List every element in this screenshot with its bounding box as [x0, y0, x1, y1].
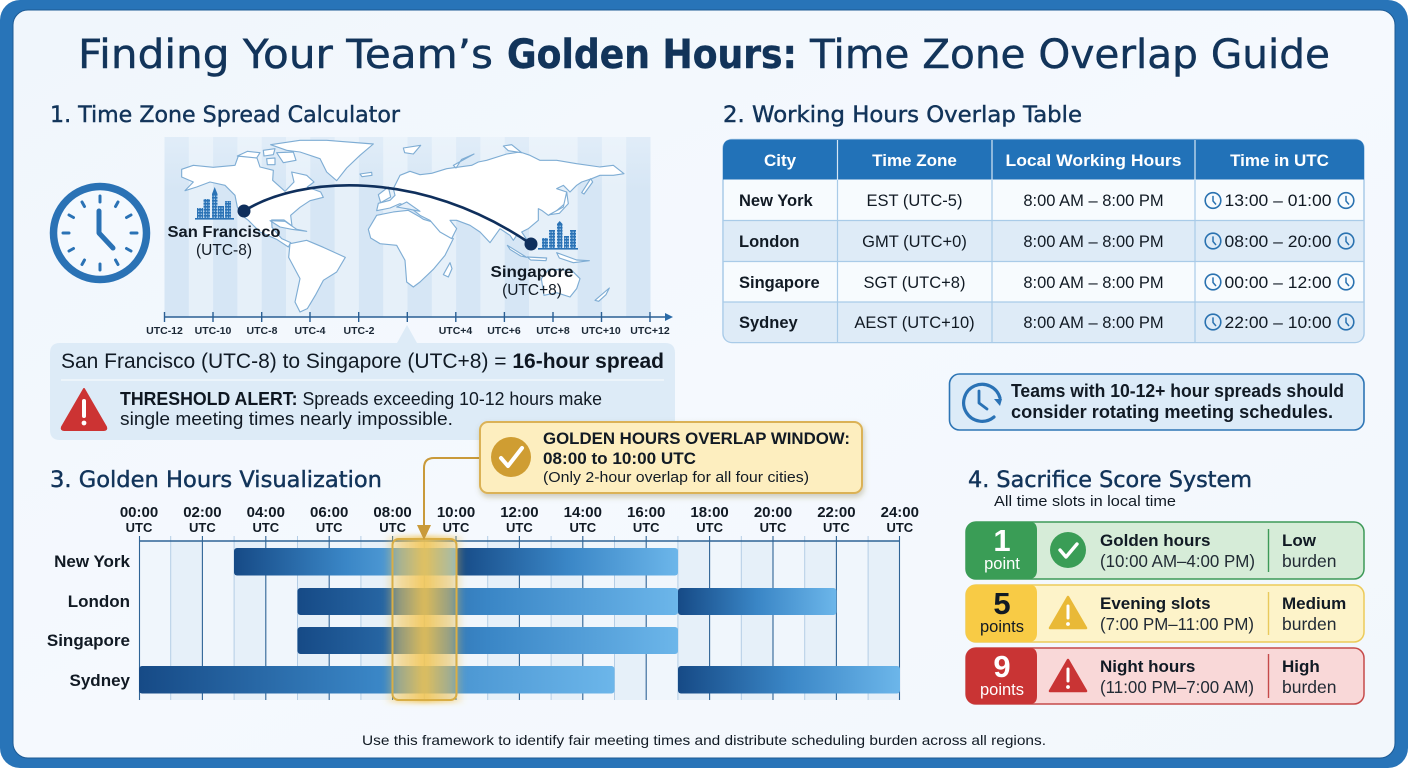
row: London: GMT (UTC+0): [862, 233, 967, 251]
bars: Sydney: [139, 666, 900, 694]
score row: 5 points: points: [980, 618, 1024, 636]
icon: red alert triangle: [62, 389, 106, 430]
bars: London: [298, 588, 836, 615]
score row: 1 point: 1: [993, 523, 1011, 558]
table header: Time in UTC: [1230, 151, 1329, 170]
icon: San Francisco skyline: [195, 187, 234, 220]
hour labels: 00:00: [120, 504, 158, 521]
row: Sydney: 22:00 – 10:00: [1224, 314, 1332, 332]
icon: Singapore skyline: [538, 221, 578, 250]
subheading: local time note: All time slots in local time: [994, 494, 1176, 510]
score row: 1 point: point: [984, 555, 1020, 573]
score row: 9 points: burden: [1282, 677, 1336, 697]
UTC axis: UTC-8: [247, 325, 278, 337]
icon: rotating clock: [964, 384, 1002, 421]
chart grid: [139, 536, 900, 700]
label: Singapore: Singapore: [490, 264, 574, 281]
hour labels: UTC: [379, 520, 407, 535]
callout text: 08:00 to 10:00 UTC: [543, 450, 696, 468]
hour labels: UTC: [252, 520, 280, 535]
table: working hours overlap: [723, 140, 1364, 342]
threshold alert text: [120, 389, 602, 429]
label: Singapore: [490, 264, 574, 299]
table header: Local Working Hours: [1006, 151, 1182, 170]
label: Singapore: (UTC+8): [502, 282, 562, 299]
table header: [764, 151, 1329, 170]
arc between San Francisco and Singapore: [244, 185, 531, 244]
row: London: [739, 233, 1354, 251]
icon: wall clock: [54, 186, 146, 280]
score row: 9 points: points: [980, 681, 1024, 699]
hour labels: UTC: [886, 520, 914, 535]
icon: gold check: [491, 437, 531, 477]
heading: section 4: 4. Sacrifice Score System: [968, 467, 1252, 493]
hour labels: 10:00: [437, 504, 475, 521]
row: Sydney: [739, 314, 1354, 332]
hour labels: UTC: [633, 520, 660, 535]
golden overlap band: [384, 536, 465, 703]
score row: 9 points: High: [1282, 657, 1320, 676]
hour labels: 06:00: [310, 504, 348, 521]
marker: San Francisco: [238, 204, 250, 218]
row: Singapore: SGT (UTC+8): [864, 274, 965, 292]
UTC axis: UTC-10: [195, 325, 232, 337]
row: Sydney: Sydney: [739, 314, 799, 332]
threshold alert text: single meeting times nearly impossible.: [120, 409, 453, 429]
bars: New York: [234, 548, 678, 576]
UTC axis: UTC+8: [536, 325, 570, 337]
score row: 5 points: burden: [1282, 614, 1336, 634]
callout text: [543, 430, 850, 486]
UTC axis: UTC+12: [630, 325, 670, 337]
hour labels: 14:00: [564, 504, 602, 521]
row: London: 8:00 AM – 8:00 PM: [1023, 233, 1164, 251]
hour labels: 18:00: [690, 504, 729, 521]
hour labels: 22:00: [817, 504, 856, 521]
row: Singapore: Singapore: [739, 274, 820, 292]
UTC axis: [146, 312, 673, 337]
row labels: Singapore: [47, 631, 130, 650]
world map with time zone stripes: [164, 137, 650, 317]
row: London: London: [739, 233, 799, 251]
callout text: GOLDEN HOURS OVERLAP WINDOW:: [543, 430, 850, 448]
hour labels: UTC: [126, 520, 153, 535]
row: Singapore: [739, 274, 1354, 292]
row labels: Sydney: [70, 671, 131, 690]
hour labels: UTC: [506, 520, 533, 535]
hour labels: UTC: [316, 520, 343, 535]
row: Sydney: 8:00 AM – 8:00 PM: [1023, 314, 1164, 332]
row labels: New York: [54, 552, 131, 571]
hour labels: 16:00: [627, 504, 665, 521]
row: New York: New York: [739, 192, 813, 210]
score row: 5 points: (7:00 PM–11:00 PM): [1100, 614, 1254, 634]
hour labels: 20:00: [754, 504, 792, 521]
score row: 9 points: 9: [993, 649, 1011, 684]
score row: 5 points: [966, 585, 1364, 642]
row: Sydney: AEST (UTC+10): [854, 314, 975, 332]
chart: golden hours timeline: [47, 504, 919, 703]
title: [78, 32, 1330, 78]
footer note: Use this framework to identify fair meeting times and distribute scheduling burden across all regions.: [362, 732, 1046, 748]
row labels: London: [68, 592, 130, 611]
hour labels: 24:00: [881, 504, 919, 521]
score row: 1 point: burden: [1282, 551, 1336, 571]
heading: section 2: 2. Working Hours Overlap Table: [723, 102, 1082, 128]
UTC axis: UTC-2: [344, 325, 375, 337]
hour labels: [120, 504, 919, 535]
row: New York: 8:00 AM – 8:00 PM: [1023, 192, 1164, 210]
callout: rotating meeting schedules: consider rotating meeting schedules.: [1011, 402, 1333, 422]
row: Singapore: 8:00 AM – 8:00 PM: [1023, 274, 1164, 292]
threshold alert text: THRESHOLD ALERT: Spreads exceeding 10-12 hours make: [120, 389, 602, 409]
spread result: San Francisco (UTC-8) to Singapore (UTC+8) = 16-hour spread: [61, 350, 664, 373]
score row: 9 points: Night hours: [1100, 657, 1195, 676]
UTC axis: UTC-4: [295, 325, 326, 337]
UTC axis: UTC+4: [439, 325, 472, 337]
title: Finding Your Team’s: [78, 32, 493, 78]
connector arrow from callout to band: [417, 458, 481, 540]
score row: 1 point: (10:00 AM–4:00 PM): [1100, 551, 1255, 571]
hour labels: 02:00: [183, 504, 222, 521]
hour labels: UTC: [823, 520, 850, 535]
score row: 5 points: Evening slots: [1100, 594, 1211, 613]
score row: 5 points: 5: [993, 586, 1011, 621]
score row: 1 point: Low: [1282, 531, 1317, 550]
callout: rotating meeting schedules: Teams with 10-12+ hour spreads should: [1011, 381, 1344, 401]
UTC axis: UTC+10: [581, 325, 621, 337]
UTC axis: UTC+6: [487, 325, 521, 337]
callout: rotating meeting schedules: [950, 374, 1364, 430]
heading: section 3: 3. Golden Hours Visualization: [50, 467, 382, 493]
hour labels: UTC: [443, 520, 470, 535]
hour labels: 12:00: [500, 504, 539, 521]
score row: 1 point: [966, 522, 1364, 579]
title: Golden Hours:: [507, 32, 797, 78]
label: San Francisco: [168, 224, 280, 259]
row: London: 08:00 – 20:00: [1224, 233, 1332, 251]
callout: golden hours overlap window: [480, 422, 862, 493]
label: San Francisco: (UTC-8): [196, 242, 252, 259]
row: New York: [739, 192, 1354, 210]
row: Singapore: 00:00 – 12:00: [1224, 274, 1332, 292]
score row: 9 points: [966, 648, 1364, 704]
bars: Singapore: [298, 627, 678, 654]
row: New York: EST (UTC-5): [867, 192, 962, 210]
UTC axis: UTC-12: [146, 325, 183, 337]
hour labels: UTC: [696, 520, 724, 535]
score row: 9 points: (11:00 PM–7:00 AM): [1100, 677, 1254, 697]
row: New York: 13:00 – 01:00: [1224, 192, 1332, 210]
panel: spread result and threshold alert: [50, 325, 675, 440]
title: Time Zone Overlap Guide: [809, 32, 1330, 78]
label: San Francisco: San Francisco: [168, 224, 280, 241]
hour labels: 08:00: [373, 504, 412, 521]
hour labels: UTC: [569, 520, 597, 535]
row labels: [47, 552, 131, 690]
heading: section 1: 1. Time Zone Spread Calculator: [50, 102, 401, 128]
table header: City: [764, 151, 797, 170]
score row: 1 point: Golden hours: [1100, 531, 1210, 550]
hour labels: 04:00: [247, 504, 285, 521]
hour labels: UTC: [760, 520, 787, 535]
table header: Time Zone: [872, 151, 957, 170]
callout text: (Only 2-hour overlap for all four cities): [543, 469, 809, 486]
marker: Singapore: [524, 238, 538, 250]
hour labels: UTC: [189, 520, 216, 535]
score row: 5 points: Medium: [1282, 594, 1346, 613]
